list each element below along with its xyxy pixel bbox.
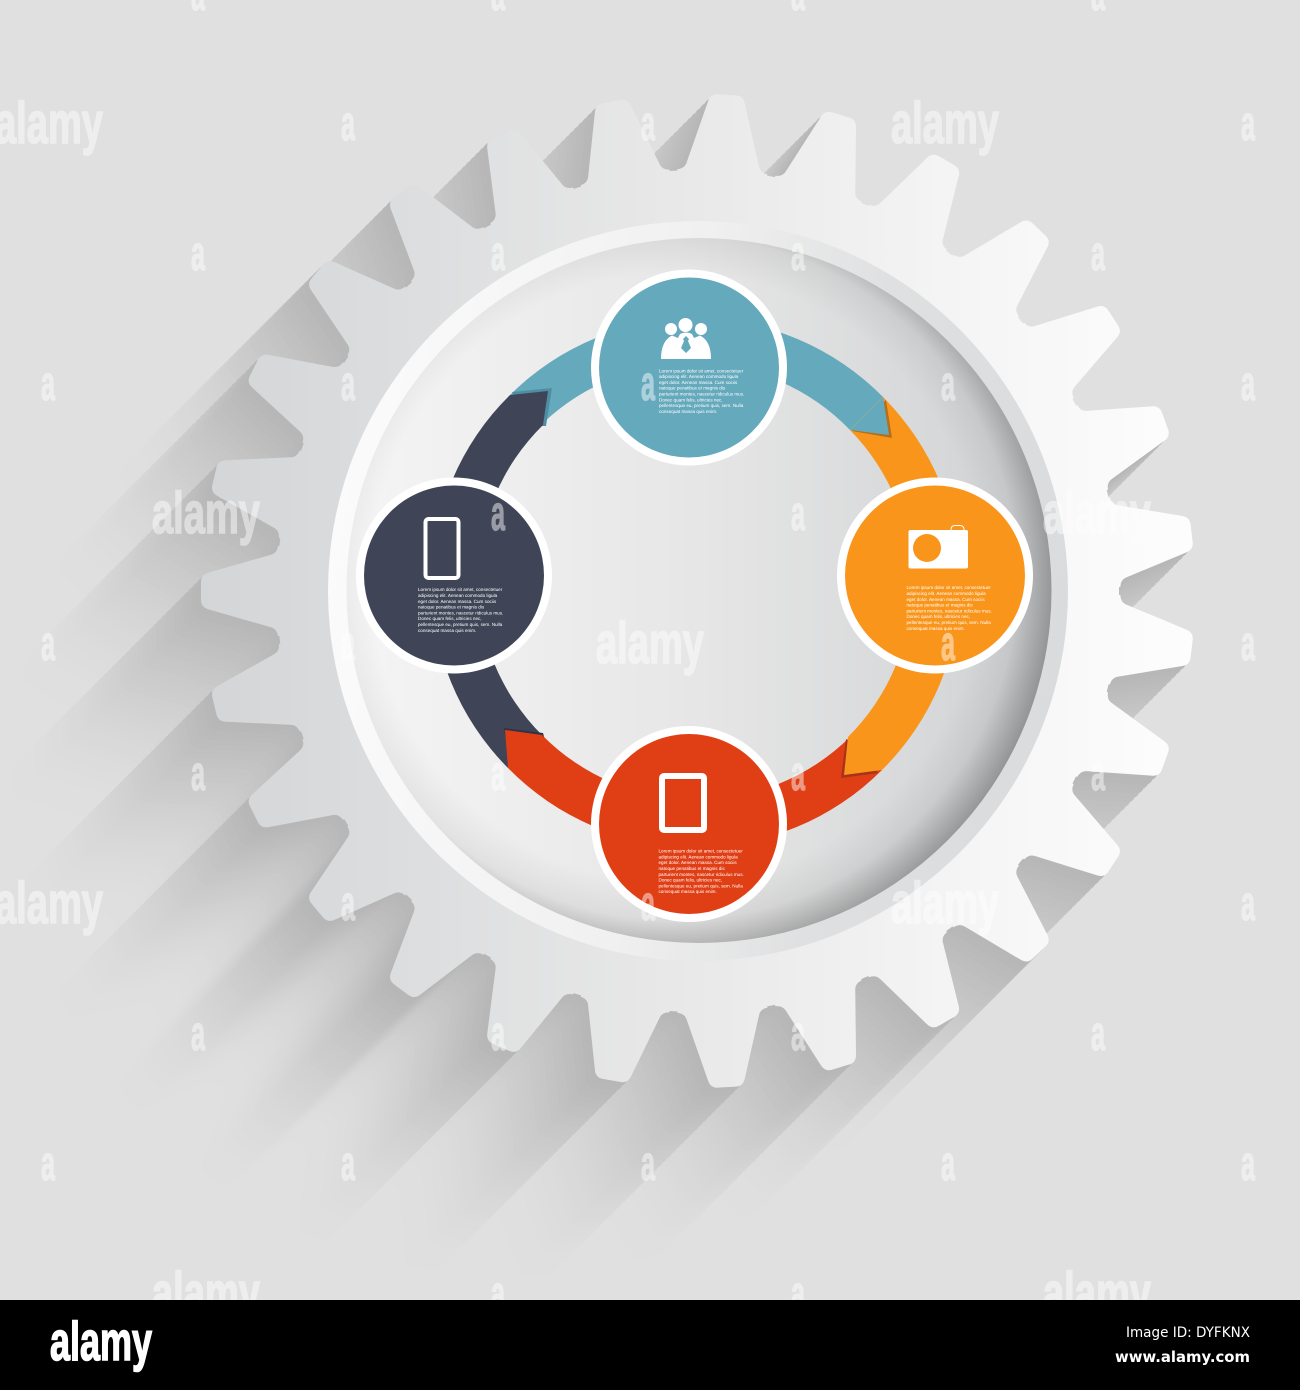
footer logo: alamy [50, 1310, 152, 1372]
footer url: www.alamy.com [1115, 1348, 1250, 1366]
watermarks: a [491, 1007, 505, 1061]
watermarks: a [791, 1267, 805, 1321]
text block: red: consequat massa quis enim. [658, 889, 717, 894]
icon: tablet [662, 776, 704, 830]
text block: orange: consequat massa quis enim. [906, 626, 965, 631]
watermarks: alamy [891, 871, 999, 936]
watermarks: a [1091, 227, 1105, 281]
gear inner recess [346, 238, 1052, 943]
text block: red: Donec quam felis, ultricies nec, [658, 878, 722, 883]
watermarks: a [941, 357, 955, 411]
watermarks: a [641, 1137, 655, 1191]
watermarks: a [341, 877, 355, 931]
footer bar [0, 1300, 1300, 1390]
ribbon arrow tip: teal [850, 397, 892, 438]
panel: bottom red circle [591, 726, 787, 922]
text block: navy: adipiscing elit. Aenean commodo ligula [418, 593, 498, 598]
ribbon segment: teal [510, 318, 889, 435]
watermarks: a [1241, 877, 1255, 931]
text block: orange: natoque penatibus et magnis dis [906, 603, 973, 608]
watermarks: a [191, 747, 205, 801]
icon: team [661, 318, 711, 359]
text block: navy: eget dolor. Aenean massa. Cum sociis [418, 599, 497, 604]
panel: top teal circle [591, 270, 787, 466]
text block: red: pellentesque eu, pretium quis, sem. Nulla [658, 883, 743, 888]
text block: teal: natoque penatibus et magnis dis [659, 386, 726, 391]
gear body [188, 81, 1208, 1101]
watermarks: a [1241, 357, 1255, 411]
text block: red: adipiscing elit. Aenean commodo ligula [658, 854, 738, 859]
watermarks: a [341, 97, 355, 151]
panel: left navy circle [356, 478, 552, 674]
watermarks: a [941, 1137, 955, 1191]
watermarks: a [191, 227, 205, 281]
watermarks: a [641, 877, 655, 931]
watermarks: a [791, 747, 805, 801]
watermarks: a [491, 1267, 505, 1321]
watermarks: alamy [152, 1261, 260, 1326]
watermarks: a [1091, 1007, 1105, 1061]
watermarks: a [1091, 747, 1105, 801]
icon: camera [908, 526, 968, 568]
watermarks: a [341, 617, 355, 671]
text block: teal: Lorem ipsum dolor sit amet, consectetuer [659, 368, 744, 373]
text block: red: Lorem ipsum dolor sit amet, consectetuer [658, 849, 743, 854]
watermarks: a [41, 1137, 55, 1191]
watermarks: alamy [1043, 1261, 1151, 1326]
text block: teal: adipiscing elit. Aenean commodo ligula [659, 374, 739, 379]
watermarks: a [641, 97, 655, 151]
text block: orange: pellentesque eu, pretium quis, sem. Nulla [906, 620, 991, 625]
text block: navy: consequat massa quis enim. [418, 628, 476, 633]
watermarks: a [1241, 617, 1255, 671]
text block: teal: parturient montes, nascetur ridiculus mus. [659, 392, 744, 396]
watermarks: a [341, 1137, 355, 1191]
watermarks: alamy [152, 481, 260, 546]
watermarks: a [791, 227, 805, 281]
text block: orange: Donec quam felis, ultricies nec, [906, 614, 970, 619]
watermarks: a [491, 487, 505, 541]
watermarks: a [941, 617, 955, 671]
watermarks: a [491, 227, 505, 281]
text block: teal: eget dolor. Aenean massa. Cum sociis [659, 380, 738, 385]
text block: orange: eget dolor. Aenean massa. Cum sociis [906, 597, 985, 602]
panel: right orange circle [837, 478, 1033, 674]
gear outer ring [328, 221, 1068, 961]
watermarks: alamy [1043, 481, 1151, 546]
watermarks: a [1241, 1137, 1255, 1191]
long gear shadow [12, 97, 1192, 1279]
ribbon segment: navy [431, 388, 552, 768]
text block: red: parturient montes, nascetur ridiculus mus. [658, 872, 744, 877]
text block: teal: Donec quam felis, ultricies nec, [659, 397, 723, 402]
text block: navy: Donec quam felis, ultricies nec, [418, 616, 482, 621]
text block: red: eget dolor. Aenean massa. Cum sociis [658, 860, 737, 865]
text block: red: natoque penatibus et magnis dis [658, 866, 725, 871]
text block: navy: Lorem ipsum dolor sit amet, consectetuer [418, 587, 503, 592]
watermarks: alamy [891, 91, 999, 156]
watermarks: a [791, 1007, 805, 1061]
watermarks: a [41, 357, 55, 411]
icon: phone [426, 519, 458, 578]
watermarks: a [341, 357, 355, 411]
watermarks: alamy [596, 611, 704, 676]
text block: teal: consequat massa quis enim. [659, 409, 717, 414]
text block: navy: natoque penatibus et magnis dis [418, 605, 485, 610]
image id: Image ID: DYFKNX [1126, 1325, 1250, 1341]
ribbon segment: red [504, 728, 882, 847]
text block: teal: pellentesque eu, pretium quis, sem. Nulla [659, 403, 744, 408]
watermarks: a [41, 617, 55, 671]
text block: orange: parturient montes, nascetur ridiculus mus. [906, 608, 992, 613]
text block: orange: adipiscing elit. Aenean commodo ligula [906, 591, 986, 596]
text block: navy: pellentesque eu, pretium quis, sem. Nulla [418, 622, 503, 627]
watermarks: a [491, 747, 505, 801]
watermarks: a [1241, 97, 1255, 151]
text block: orange: Lorem ipsum dolor sit amet, consectetuer [906, 585, 991, 590]
watermarks: a [641, 357, 655, 411]
cycle ribbon [431, 318, 960, 847]
watermarks: a [791, 487, 805, 541]
text block: navy: parturient montes, nascetur ridiculus mus. [418, 610, 503, 615]
watermarks: a [191, 1007, 205, 1061]
ribbon segment: orange [841, 397, 960, 778]
